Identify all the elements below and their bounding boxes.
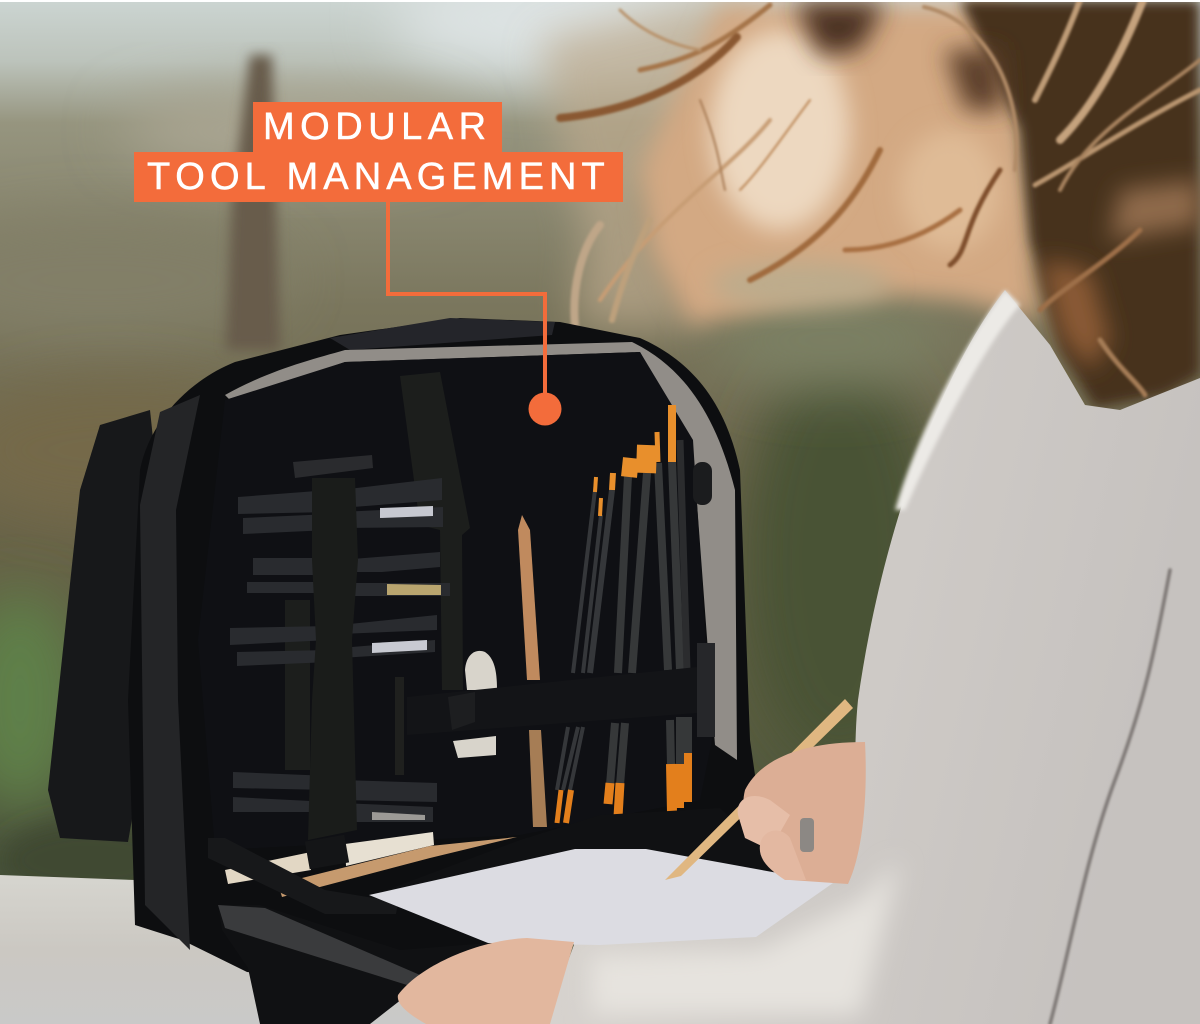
writing pencil — [665, 699, 853, 880]
drawing pencil — [518, 515, 547, 827]
hair: wispy translucent layer — [540, 0, 760, 330]
tool: white pen — [345, 832, 434, 866]
ring — [800, 818, 814, 852]
foreground elastic over brushes — [407, 667, 697, 735]
hair: main light mass — [640, 5, 1040, 325]
bag: top handle strap — [330, 318, 555, 350]
brushes — [557, 405, 688, 823]
open bag — [48, 318, 770, 985]
small elastic backing strip — [395, 677, 404, 775]
sweater: lit shoulder edge — [895, 290, 1020, 510]
tool: diagonal strap — [208, 838, 398, 914]
hair — [540, 0, 1200, 408]
concrete ledge — [0, 875, 500, 1024]
paper sheet — [369, 849, 833, 945]
strap: marker holder front — [308, 478, 358, 840]
sweater: lit sleeve — [590, 860, 900, 1015]
bag: interior — [198, 352, 712, 850]
tool: strap band — [305, 835, 349, 869]
black flap above paper — [360, 808, 800, 900]
title label: line 2: TOOL MANAGEMENT — [147, 156, 610, 198]
hand holding pencil — [738, 742, 866, 884]
buckle — [448, 692, 475, 730]
eraser — [453, 651, 497, 758]
bag: side pocket — [48, 410, 170, 842]
bag: grey lining — [225, 342, 737, 760]
hair: strands — [560, 0, 1200, 395]
elastic straps — [285, 372, 470, 770]
markers — [230, 478, 450, 822]
bag: outer shell — [128, 318, 770, 985]
lower hand — [398, 938, 574, 1024]
bottom flap and straps — [218, 905, 530, 1024]
tool: wood pencil — [278, 837, 517, 897]
top white line — [0, 0, 1200, 2]
marker labels — [372, 506, 441, 820]
sweater — [545, 290, 1200, 1024]
strap: top tube — [293, 455, 373, 478]
bottom tools — [208, 832, 517, 914]
tool: cream tube — [225, 852, 311, 884]
bag: side strap — [140, 395, 200, 950]
title label: line 1: MODULAR — [263, 106, 492, 148]
sweater: fold shadow — [1050, 570, 1170, 1024]
strap: upper right vertical — [400, 372, 470, 690]
hair: dark right mass — [960, 0, 1200, 408]
knob and side block — [693, 462, 715, 737]
strap: marker holder back — [285, 600, 310, 770]
